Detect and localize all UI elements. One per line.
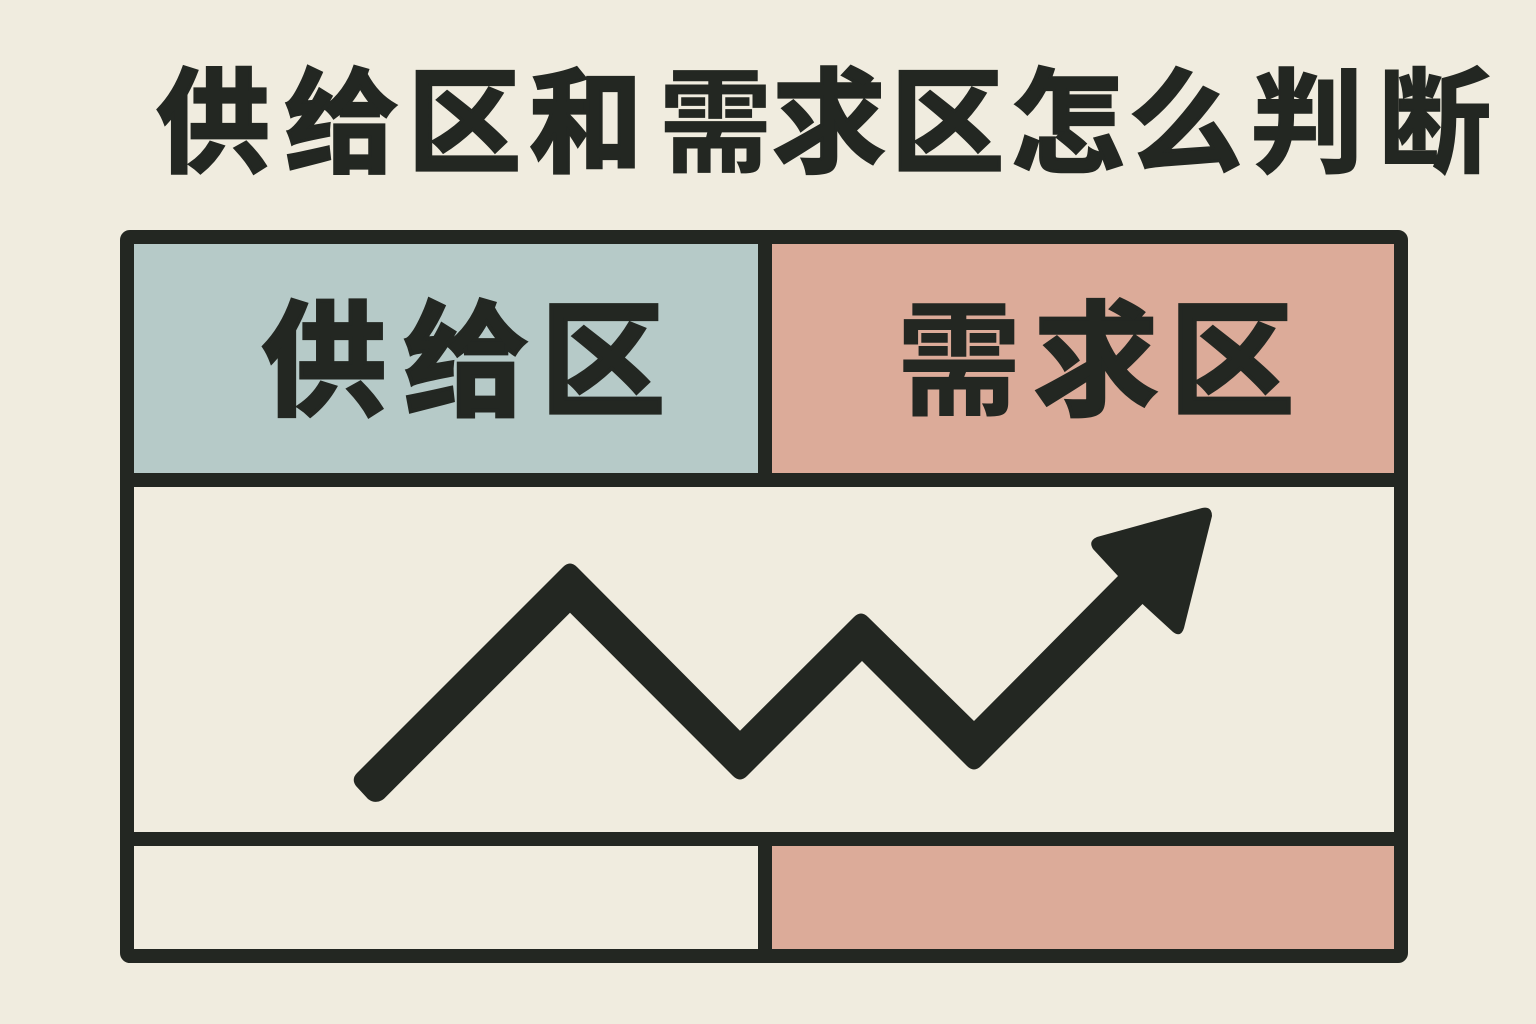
panel: demand zone header (765, 237, 1401, 480)
panel: demand zone header: 需求区 (897, 294, 1294, 432)
panel: bottom right demand cell (765, 839, 1401, 956)
title: 供给区和需求区怎么判断 (156, 61, 1491, 187)
panel: bottom left empty cell (127, 839, 765, 956)
panel: supply zone header (127, 237, 765, 480)
panel: comparison table (127, 237, 1401, 956)
arrow: zigzag price line (354, 508, 1212, 802)
table frame and dividers (127, 237, 1401, 956)
panel: supply zone header: 供给区 (262, 294, 665, 432)
